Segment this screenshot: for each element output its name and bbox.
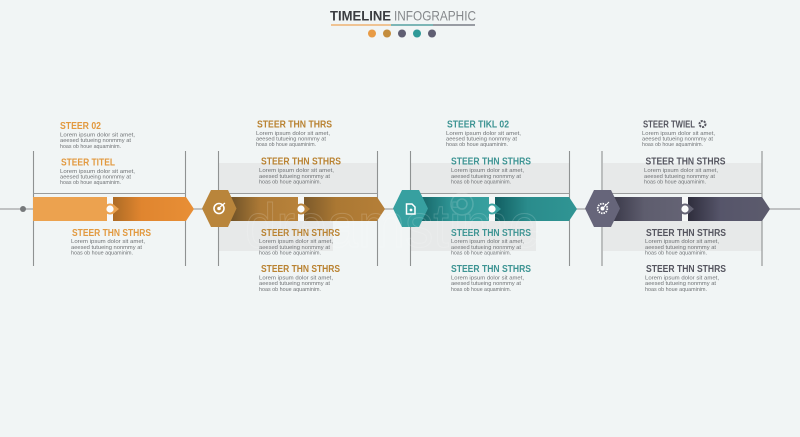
panel: step 3 <box>393 120 577 293</box>
text block <box>60 132 135 150</box>
text block: hoas ob houe aquaminim. <box>645 287 707 293</box>
text block: aeesed tutueing nonmmy at <box>259 281 330 287</box>
heading: STEER THN STHRS <box>451 228 531 239</box>
text block: hoas ob houe aquaminim. <box>446 142 508 148</box>
icon: document hexagon <box>393 190 428 227</box>
text block: aeesed tutueing nonmmy at <box>451 174 521 180</box>
text block: hoas ob houe aquaminim. <box>451 250 511 256</box>
text block: hoas ob houe aquaminim. <box>451 287 511 293</box>
text block: Lorem ipsum dolor sit amet, <box>259 276 333 282</box>
text block: hoas ob houe aquaminim. <box>644 180 706 186</box>
text block: hoas ob houe aquaminim. <box>71 250 133 256</box>
heading: STEER THN STHRS <box>646 264 726 275</box>
text block: aeesed tutueing nonmmy at <box>645 245 716 251</box>
frame lines step 2 <box>218 151 378 266</box>
text block: Lorem ipsum dolor sit amet, <box>451 168 524 174</box>
text block: Lorem ipsum dolor sit amet, <box>259 239 333 245</box>
text block: hoas ob houe aquaminim. <box>642 142 703 148</box>
text block <box>259 276 333 293</box>
text block: Lorem ipsum dolor sit amet, <box>71 239 145 245</box>
text block <box>256 131 330 148</box>
text block: aeesed tutueing nonmmy at <box>71 245 142 251</box>
panel: step 1 <box>33 121 194 266</box>
heading: STEER THN STHRS <box>646 228 726 239</box>
text block <box>645 276 719 293</box>
text block: Lorem ipsum dolor sit amet, <box>259 168 334 174</box>
heading: STEER THN STHRS <box>451 157 531 168</box>
heading: STEER THN THRS <box>257 120 332 130</box>
heading: STEER THN STHRS <box>261 228 340 239</box>
text block: aeesed tutueing nonmmy at <box>451 281 521 287</box>
text block: Lorem ipsum dolor sit amet, <box>60 169 135 175</box>
text block <box>60 169 135 186</box>
heading: STEER TIKL 02 <box>447 120 509 130</box>
text block: Lorem ipsum dolor sit amet, <box>645 276 719 282</box>
title block <box>330 8 476 38</box>
text block <box>71 239 145 256</box>
frame lines step 1 <box>34 151 186 266</box>
text block <box>642 131 715 148</box>
timeline base line <box>0 206 800 212</box>
text block: aeesed tutueing nonmmy at <box>60 174 131 180</box>
text block: aeesed tutueing nonmmy at <box>645 281 716 287</box>
heading: STEER THN STHRS <box>646 157 726 168</box>
arrow step 2 <box>230 197 385 221</box>
icon: target hexagon <box>202 190 236 227</box>
text block: Lorem ipsum dolor sit amet, <box>446 131 521 137</box>
heading: STEER TWIEL <box>643 120 695 130</box>
text block: aeesed tutueing nonmmy at <box>259 174 330 180</box>
text block: hoas ob houe aquaminim. <box>259 287 321 293</box>
icon: small gear <box>700 121 706 127</box>
text block: Lorem ipsum dolor sit amet, <box>642 131 715 137</box>
text block: Lorem ipsum dolor sit amet, <box>451 276 524 282</box>
text block: Lorem ipsum dolor sit amet, <box>451 239 524 245</box>
icon: gear target hexagon <box>585 190 620 227</box>
text block: hoas ob houe aquaminim. <box>60 144 121 150</box>
text block <box>451 239 524 256</box>
frame lines step 3 <box>410 151 570 266</box>
text block: aeesed tutueing nonmmy at <box>451 245 521 251</box>
heading: lower: STEER THN STHRS <box>72 228 151 239</box>
text block: Lorem ipsum dolor sit amet, <box>256 131 330 137</box>
text block <box>259 239 333 256</box>
text block: Lorem ipsum dolor sit amet, <box>645 239 719 245</box>
bands step 2 <box>219 163 377 251</box>
text block: aeesed tutueing nonmmy at <box>60 138 131 144</box>
text block: aeesed tutueing nonmmy at <box>642 136 713 142</box>
text block: Lorem ipsum dolor sit amet, <box>644 168 718 174</box>
heading: STEER THN STHRS <box>261 264 340 275</box>
bands step 4 <box>603 163 762 251</box>
text block <box>644 168 718 186</box>
text block: Lorem ipsum dolor sit amet, <box>60 132 135 138</box>
arrow step 4 <box>614 197 770 221</box>
text block <box>446 131 521 148</box>
text block: hoas ob houe aquaminim. <box>451 180 511 186</box>
heading: STEER THN STHRS <box>451 264 531 275</box>
text block <box>451 168 524 186</box>
watermark: dreamstime <box>245 192 540 261</box>
panel: step 4 <box>585 120 770 293</box>
text block: hoas ob houe aquaminim. <box>645 250 707 256</box>
text block: hoas ob houe aquaminim. <box>259 180 321 186</box>
title: second word: INFOGRAPHIC <box>394 8 476 24</box>
text block: hoas ob houe aquaminim. <box>259 250 321 256</box>
heading: step title: STEER TITEL <box>61 158 115 168</box>
text block <box>645 239 719 256</box>
text block <box>451 276 524 293</box>
heading: step 02: STEER 02 <box>60 121 101 132</box>
heading: STEER THN STHRS <box>261 157 341 168</box>
text block: aeesed tutueing nonmmy at <box>446 136 517 142</box>
frame lines step 4 <box>602 151 762 266</box>
title underline <box>331 24 475 26</box>
text block <box>259 168 334 186</box>
title: timeline infographic: TIMELINE <box>330 8 391 24</box>
arrow step 1 <box>33 197 194 221</box>
text block: aeesed tutueing nonmmy at <box>644 174 715 180</box>
arrow step 3 <box>422 197 577 221</box>
text block: aeesed tutueing nonmmy at <box>259 245 330 251</box>
panel: step 2 <box>202 120 385 293</box>
text block: aeesed tutueing nonmmy at <box>256 136 326 142</box>
text block: hoas ob houe aquaminim. <box>60 180 121 186</box>
title dots <box>368 30 436 38</box>
text block: hoas ob houe aquaminim. <box>256 142 316 148</box>
bands step 3 <box>411 163 569 251</box>
